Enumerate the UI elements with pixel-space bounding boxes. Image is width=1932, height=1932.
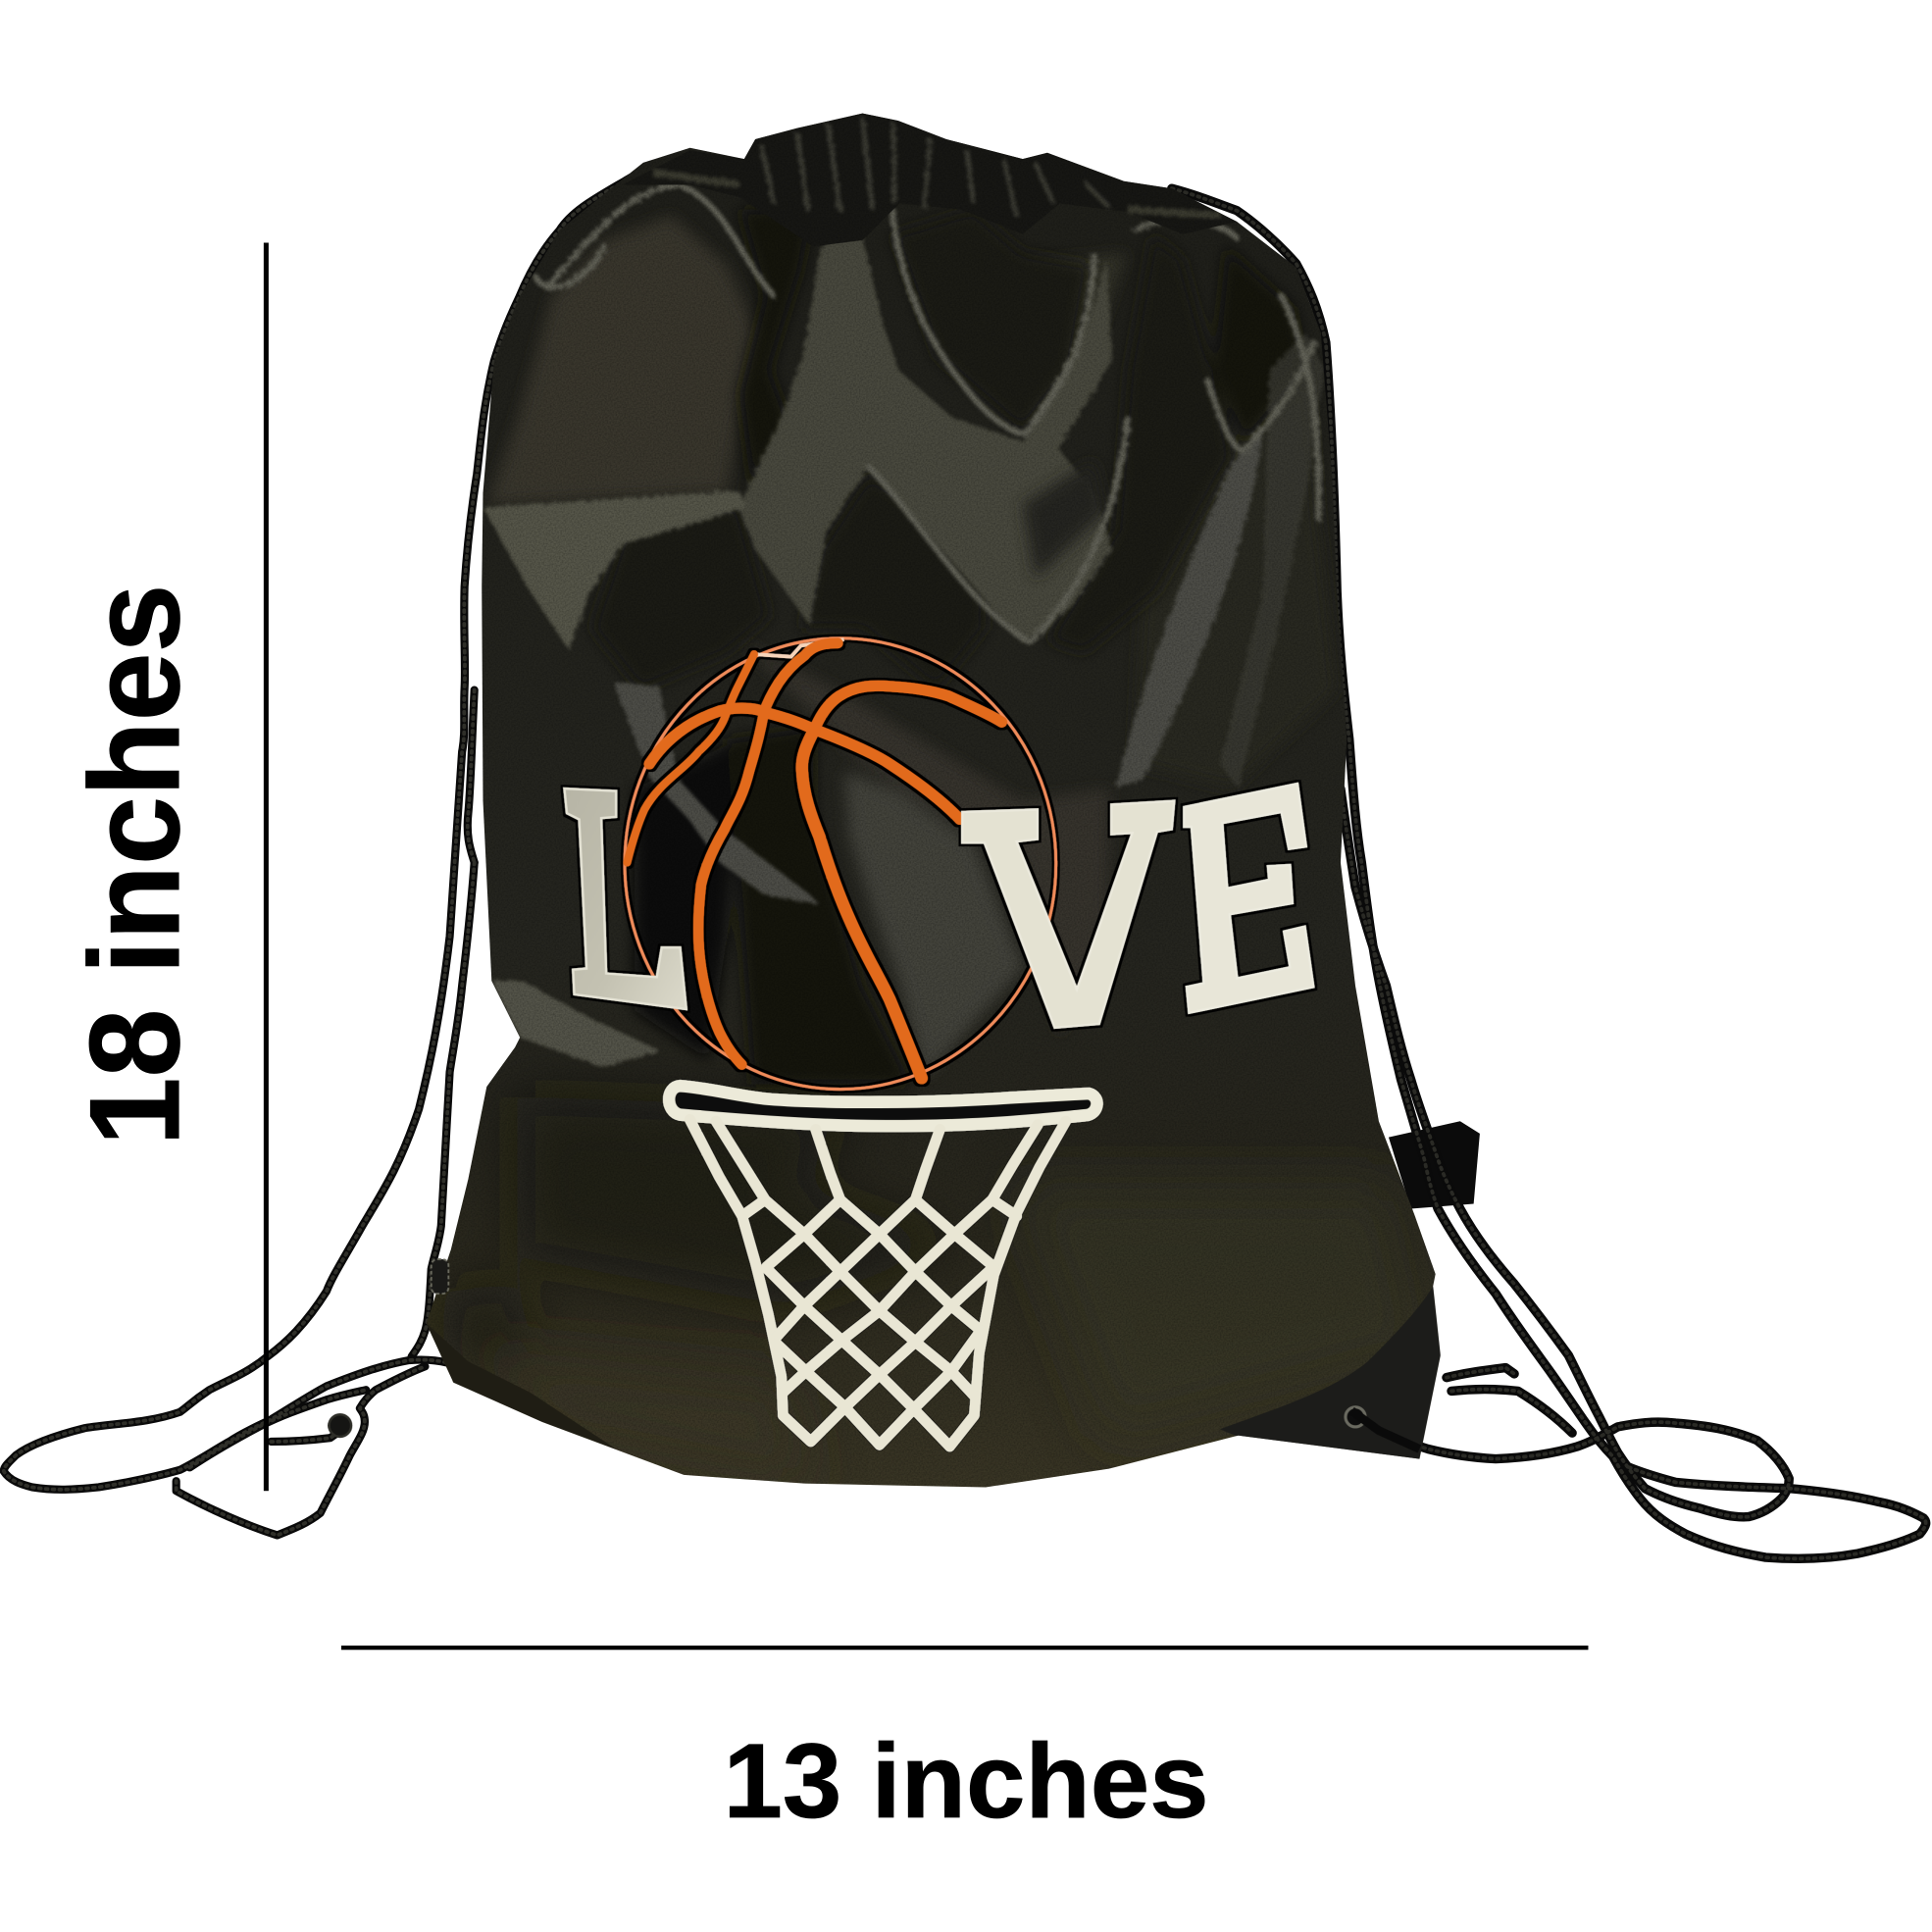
height dimension line: [264, 243, 269, 1491]
fabric grain: [419, 111, 1454, 1491]
drawstring bag body: [407, 99, 1466, 1503]
top gathered band: [622, 114, 1237, 246]
cords: right drawstring: [1172, 188, 1926, 1558]
width label: 13 inches: [723, 1721, 1209, 1840]
cord end from grommet: [1351, 1411, 1419, 1449]
left corner fold: [427, 1323, 616, 1449]
cords: left drawstring: [4, 178, 631, 1535]
left side knot: [432, 1259, 448, 1294]
height label: 18 inches: [63, 585, 206, 1145]
letter V: [962, 801, 1174, 1028]
basketball hoop and net: [669, 1086, 1097, 1447]
basketball outline: [625, 638, 1056, 1090]
hoop rim: [669, 1086, 1097, 1126]
grommet: [1346, 1407, 1365, 1427]
hoop net: [689, 1120, 1066, 1447]
basketball seams: [627, 643, 1001, 1078]
black object behind bag: [1389, 1121, 1480, 1209]
bag folds: thin fold lines: [536, 184, 1319, 642]
left knot: [329, 1414, 351, 1437]
bag folds: mid-tone panels: [486, 216, 1337, 1078]
letter E: [1184, 784, 1313, 1013]
letter L: [564, 788, 686, 1009]
lower bag shading: [437, 1096, 1429, 1491]
bag folds: dark shadows: [591, 210, 1306, 1085]
bottom right reinforced corner: [1220, 1287, 1443, 1461]
bag folds: lit highlights: [483, 211, 1325, 1067]
width dimension line: [341, 1646, 1588, 1650]
artwork: LOVE lettering with basketball: [564, 638, 1313, 1090]
dark cut inside fold: [1023, 460, 1106, 579]
